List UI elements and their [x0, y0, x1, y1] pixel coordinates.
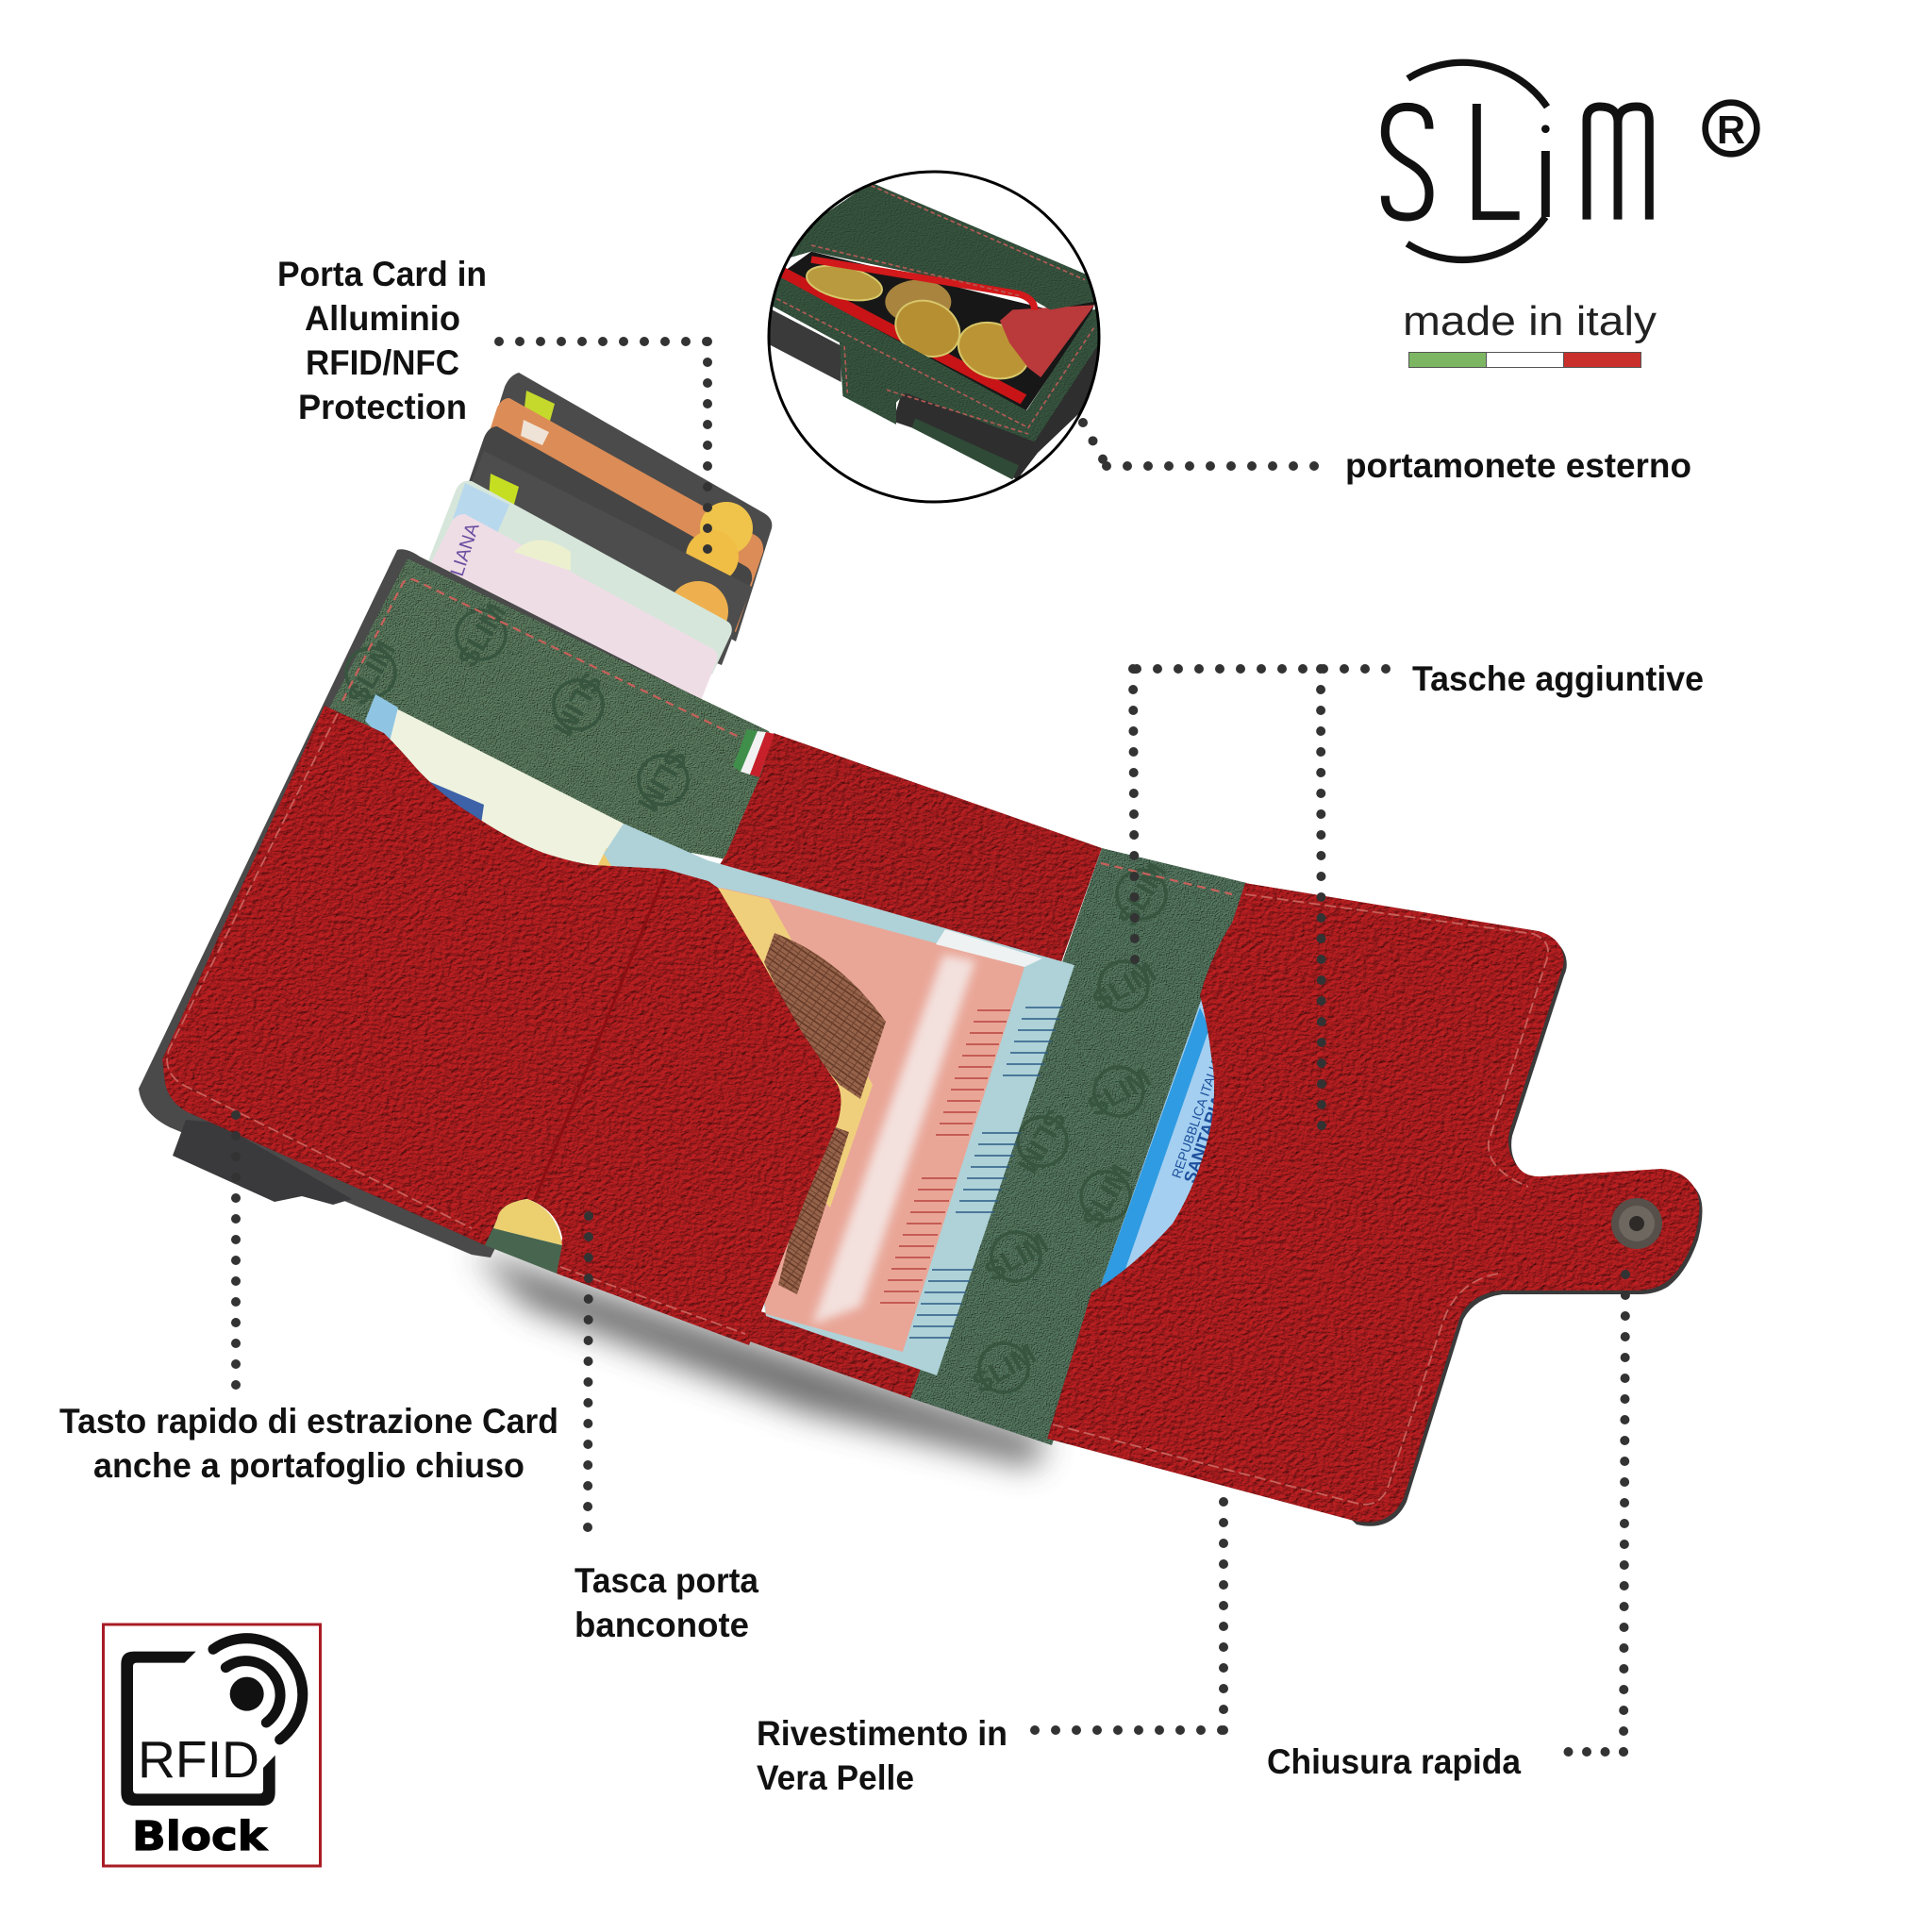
inset: top green flap: [790, 182, 1094, 309]
label: coin pocket: portamonete esterno: [1345, 446, 1691, 485]
metal card case: [139, 549, 755, 1257]
leader: note pocket: [588, 1216, 589, 1529]
label: card holder: RFID/NFC: [306, 343, 459, 382]
inset: stitches: [776, 186, 1094, 434]
label: card holder: Protection: [298, 388, 467, 426]
coin 1: [806, 265, 883, 302]
label: quick closure: Chiusura rapida: [1267, 1742, 1521, 1781]
card: dark second: [453, 426, 752, 660]
strip stitching: [1101, 863, 1232, 894]
label: genuine leather: Rivestimento in: [757, 1714, 1008, 1753]
card text: LIANA: [447, 520, 484, 579]
flap fold: [535, 872, 666, 1199]
card: orange: [476, 398, 763, 632]
inset: red inner flap: [1000, 305, 1094, 377]
coin 4: [957, 321, 1027, 379]
card: pink licence: [425, 514, 717, 708]
label: note pocket: banconote: [575, 1606, 749, 1644]
note: colosseum arches: [764, 933, 886, 1099]
stack of cards: [425, 373, 772, 708]
card: light id: [426, 481, 732, 675]
panel: left red leather with flap: [162, 706, 841, 1345]
card text: SANITARIA: [1180, 1093, 1227, 1186]
dark edge: [1305, 935, 1702, 1526]
inset: left case: [769, 308, 841, 382]
stitching: [1053, 894, 1548, 1505]
made in italy: made in italy: [1403, 298, 1657, 344]
stitching: [167, 713, 745, 1334]
embossed logo 3: SLIM: [546, 667, 608, 741]
embossed strip logo 5: SLIM: [1010, 1104, 1072, 1178]
card dark stripe: [1099, 1008, 1209, 1291]
red leather bottom stripe: [557, 1274, 943, 1398]
embossed strip logo 2: SLIM: [1087, 957, 1161, 1018]
card cream circle: [514, 540, 571, 571]
card blue corner: [453, 483, 509, 538]
card: dark top: [472, 373, 772, 641]
embossed logo 1: SLIM: [452, 598, 513, 673]
label: card holder: [277, 255, 487, 426]
card outline: [121, 1652, 275, 1806]
embossed strip logo 7: SLIM: [967, 1339, 1041, 1400]
inset: zipper: [811, 259, 1035, 309]
card chip lower: [489, 474, 519, 508]
embossed logo 4: SLIM: [631, 742, 692, 817]
embossed strip logo 3: SLIM: [1082, 1062, 1157, 1124]
panel: green suede interior: [328, 558, 778, 863]
note: dark blue rectangle: [428, 781, 484, 830]
card yellow circle lower: [686, 530, 739, 583]
label: quick card button: [59, 1402, 558, 1485]
leader: quick card button: [231, 1115, 241, 1387]
blue health card: [1099, 995, 1245, 1294]
leader: extra pockets second: [1321, 669, 1322, 1132]
embossed strip logo 4: SLIM: [1076, 1159, 1138, 1234]
card chip yellow: [524, 391, 555, 425]
leader: genuine leather: [1035, 1496, 1224, 1730]
inset: lower case: [893, 346, 1104, 479]
note: colosseum lower: [778, 1127, 849, 1294]
embossed logo 2: SLIM: [341, 636, 403, 710]
label: quick card button: Tasto rapido di estrazione Card: [59, 1402, 558, 1441]
leader: coin pocket: [1083, 423, 1318, 466]
logo dot: [1541, 125, 1550, 133]
leader: quick closure: [1568, 1274, 1625, 1752]
note: cream top: [388, 708, 660, 896]
inset: dark interior: [776, 252, 1096, 412]
note: red tick marks: [880, 1010, 1010, 1303]
card orange circle: [668, 581, 728, 641]
note: blue back: [604, 824, 1074, 1375]
card extraction tab: [173, 1120, 352, 1205]
inset: red lining: [776, 267, 1026, 404]
inset: lower green edge: [912, 418, 1019, 479]
label: card holder: Porta Card in: [277, 255, 487, 293]
red leather: [1047, 883, 1700, 1523]
embossed strip logo 1: SLIM: [1112, 858, 1174, 932]
inset ring: [769, 172, 1099, 502]
snap button: [1611, 1198, 1662, 1249]
signal dot: [230, 1677, 264, 1711]
logo letters: [1385, 104, 1649, 220]
panel: right red leather with snap tab: [1047, 883, 1702, 1526]
RFID block badge: [104, 1624, 321, 1866]
RFID text: RFID: [138, 1730, 259, 1789]
label: card holder: Alluminio: [305, 299, 460, 338]
panel: inset circle coin pocket: [769, 172, 1104, 502]
label: extra pockets: Tasche aggiuntive: [1412, 659, 1704, 698]
coin 3: [894, 300, 960, 358]
panel: green centre strip: [910, 848, 1247, 1445]
embossed logos: [333, 593, 701, 822]
leader: extra pockets: [1133, 669, 1386, 960]
note: blue corner: [365, 694, 398, 745]
notch yellow: [493, 1199, 562, 1245]
notch green: [485, 1228, 562, 1274]
italian flag bar: [1409, 353, 1641, 368]
logo ring: [1407, 62, 1547, 259]
panel: red centre pocket: [689, 733, 1102, 1009]
registered mark: [1706, 103, 1757, 154]
registered letter: R: [1717, 108, 1745, 152]
italian ribbon: [733, 729, 774, 777]
label: note pocket: Tasca porta: [575, 1561, 758, 1600]
Block text: Block: [132, 1813, 269, 1860]
signal arcs: [213, 1639, 303, 1740]
card: dark third: [443, 451, 752, 665]
badge frame: [104, 1624, 321, 1866]
card stripe white: [521, 420, 549, 445]
label: genuine leather: [757, 1714, 1008, 1797]
card text: REPUBBLICA ITALIANA: [1169, 1038, 1230, 1180]
label: quick card button: anche a portafoglio chiuso: [93, 1446, 525, 1485]
label: genuine leather: Vera Pelle: [757, 1758, 914, 1797]
wallet shadow: [472, 1250, 1047, 1467]
leader: card holder: [499, 341, 708, 557]
note: yellow corner: [594, 848, 651, 873]
note: blue tick marks: [909, 1008, 1063, 1338]
note: white hologram band: [812, 955, 975, 1324]
banknotes: [365, 694, 1074, 1375]
embossed strip logo 6: SLIM: [979, 1227, 1054, 1289]
stitching: [342, 579, 742, 739]
logo: SLIM: [1385, 62, 1757, 259]
coin 2: [885, 279, 951, 318]
card yellow circle: [700, 502, 753, 555]
note: silver foil: [936, 929, 1042, 967]
note: pink banknote: [721, 888, 1024, 1352]
inset: lower green strip with strap: [771, 275, 1104, 441]
label: note pocket: [575, 1561, 758, 1644]
note: yellow strip: [718, 888, 873, 1208]
